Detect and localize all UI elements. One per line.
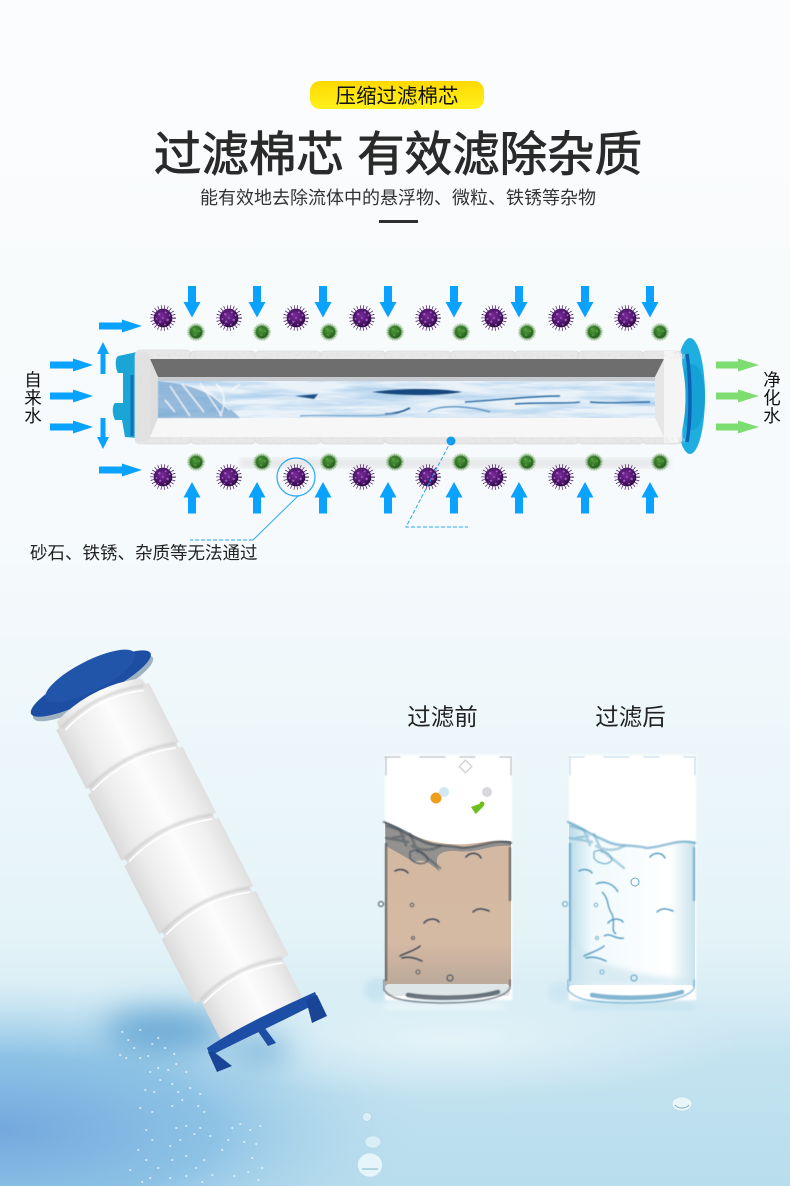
label: after filtering: 过滤后: [595, 704, 666, 730]
filter tube: [135, 350, 686, 444]
glass: after filtering: [562, 755, 696, 1003]
arrows: top inflow: [184, 286, 658, 318]
tube interior: [150, 359, 664, 377]
arrows: left inflow: [50, 320, 142, 476]
badge: [310, 81, 484, 109]
water: [158, 381, 655, 418]
badge: 压缩过滤棉芯: [336, 85, 458, 108]
label: purified water: 水: [763, 406, 781, 426]
top flange: [21, 634, 160, 732]
callout: impurities blocked: [30, 458, 315, 563]
label: purified water: 化: [763, 388, 781, 408]
right cap: [675, 338, 705, 454]
filtration diagram: [24, 286, 781, 563]
impurities: green particles: [189, 325, 667, 469]
glass: before filtering: [378, 755, 512, 1003]
label: tap water: [24, 370, 42, 426]
left cap: [113, 352, 137, 438]
header: [154, 81, 642, 223]
water droplets: [358, 1097, 692, 1177]
arrows: purified outflow: [716, 358, 759, 434]
title: 过滤棉芯 有效滤除杂质: [154, 129, 642, 182]
bottom base plate: [207, 992, 327, 1072]
label: before filtering: 过滤前: [407, 704, 478, 730]
label: tap water: 来: [24, 388, 42, 408]
impurities: purple particles: [153, 308, 637, 487]
callout: filter cotton pointer: [406, 436, 468, 527]
callout: impurities blocked: 砂石、铁锈、杂质等无法通过: [30, 543, 258, 563]
label: tap water: 自: [24, 370, 42, 390]
filter cartridge: [21, 634, 327, 1072]
filter cartridge shadow: [103, 1008, 290, 1062]
water speckles: [120, 1030, 262, 1182]
arrows: bottom inflow: [184, 482, 658, 514]
label: tap water: 水: [24, 406, 42, 426]
subtitle: 能有效地去除流体中的悬浮物、微粒、铁锈等杂物: [200, 188, 596, 208]
particles: [430, 760, 492, 811]
before / after comparison: [364, 704, 696, 1009]
puddles and reflections: [364, 978, 695, 1009]
label: purified water: [763, 370, 781, 426]
label: purified water: 净: [763, 370, 781, 390]
